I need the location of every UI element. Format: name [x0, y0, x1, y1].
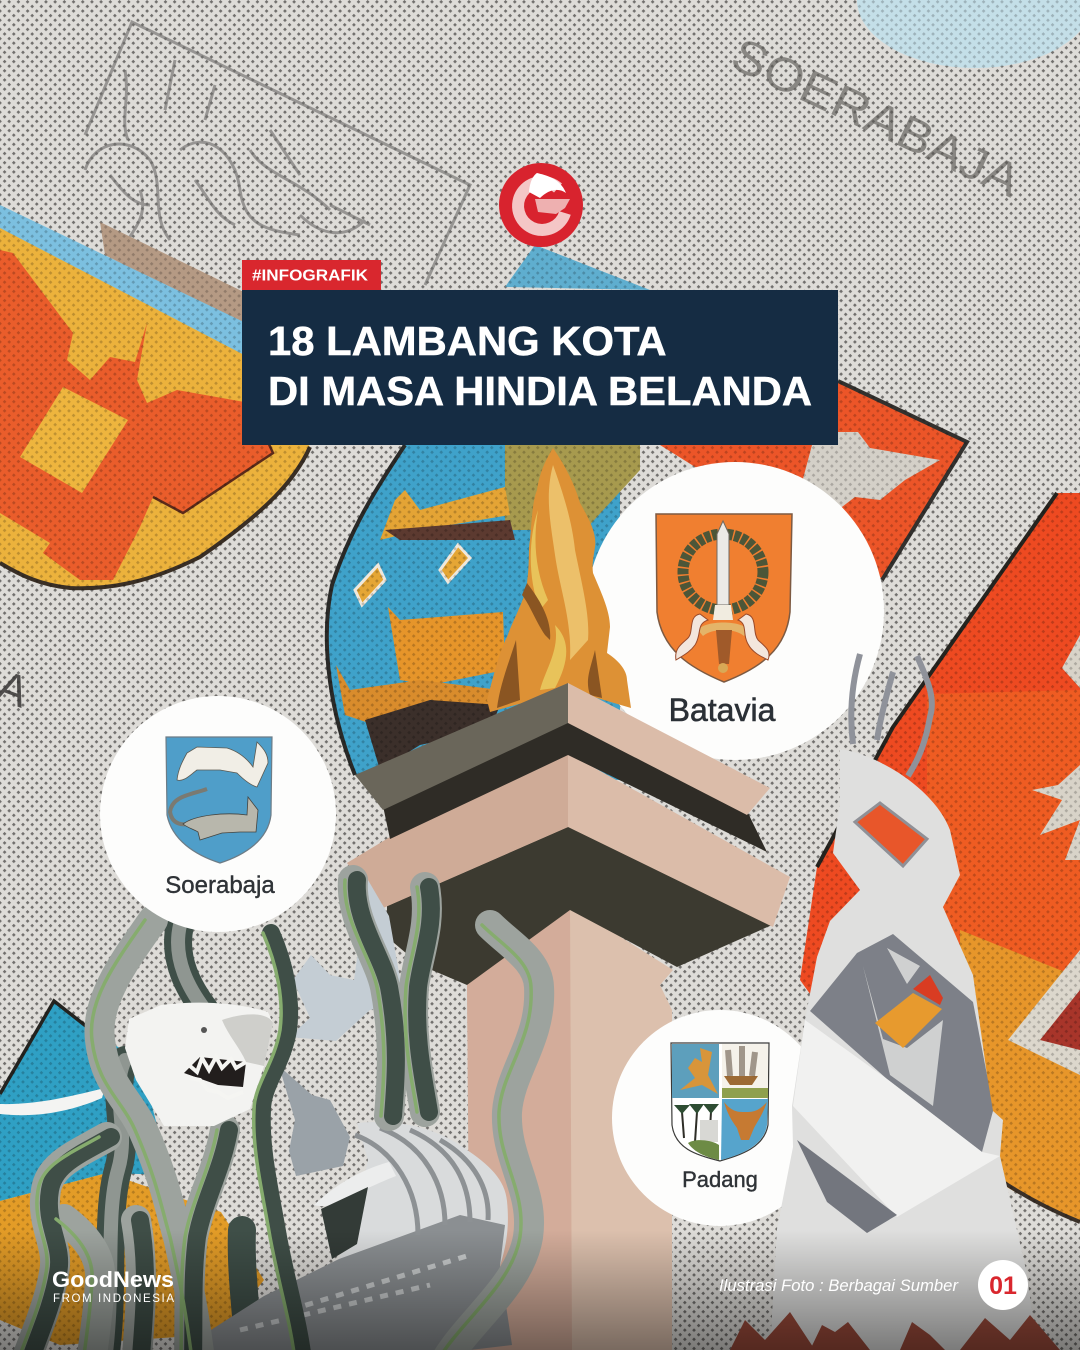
- lizard: [170, 789, 207, 824]
- back kelp: [105, 925, 248, 1350]
- flames at bottom right: [730, 1312, 1060, 1350]
- left fin: [0, 1088, 105, 1115]
- illustration: shark, crocodile and kelp: [0, 880, 539, 1350]
- panel: Soerabaja circle: [100, 696, 336, 932]
- icon: Batavia coat of arms: [656, 514, 792, 682]
- crocodile head: [279, 1066, 350, 1176]
- red shield with bird, right of title: [660, 381, 967, 580]
- illustration: Tugu monument with flame: [347, 448, 790, 1350]
- brand: GoodNews from Indonesia: [52, 1267, 174, 1305]
- title block: [242, 290, 838, 445]
- label: Padang: Padang: [682, 1167, 758, 1192]
- panel: Padang circle: [612, 1010, 828, 1226]
- icon: Padang coat of arms: [671, 1043, 769, 1161]
- shield with red fortress, top left: [0, 205, 310, 588]
- grey interior of the spiral: [810, 934, 993, 1152]
- blue and orange shield, bottom left: [0, 1001, 264, 1345]
- illustration: twisted white spiral monument: [770, 654, 1037, 1350]
- flame: [487, 448, 631, 712]
- panel: Batavia circle: [586, 462, 884, 760]
- page number badge: 01: [989, 1272, 1017, 1300]
- icon: Soerabaja coat of arms: [166, 737, 272, 863]
- crocodile front leg: [314, 1162, 396, 1206]
- crocodile: [189, 1066, 512, 1350]
- title: DI MASA HINDIA BELANDA: [268, 368, 812, 414]
- sketched emblem top left: [85, 22, 470, 285]
- bottom fade: [0, 1230, 1080, 1350]
- prongs: [851, 654, 932, 776]
- dark kelp over shark: [22, 880, 431, 1350]
- dark gap under leg: [321, 1187, 368, 1259]
- rear shark: [289, 880, 404, 1041]
- page number badge: [978, 1260, 1028, 1310]
- pillar: [467, 905, 673, 1350]
- brand: GoodNews from Indonesia: GoodNews: [52, 1267, 174, 1292]
- map label Soerabaja: SOERABAJA: [724, 27, 1030, 207]
- front kelp grey edges: [18, 880, 539, 1350]
- shark: [125, 1003, 273, 1126]
- crocodile back ridges: [355, 1128, 488, 1235]
- crocodile body: [339, 1122, 508, 1280]
- label: Soerabaja: Soerabaja: [165, 872, 275, 899]
- inner light facets: [863, 948, 943, 1106]
- lower capital: [347, 719, 790, 985]
- upper capital: [355, 683, 770, 815]
- kelp green ribs: [10, 880, 531, 1350]
- brand: GoodNews from Indonesia: FROM INDONESIA: [53, 1293, 174, 1305]
- shield with blue band behind title: [505, 245, 650, 290]
- fish: [177, 742, 268, 787]
- monument body: [770, 749, 1037, 1350]
- hashtag label: #INFOGRAFIK: [252, 268, 369, 284]
- hashtag label: [242, 260, 381, 290]
- label: Batavia: Batavia: [669, 692, 776, 728]
- blue shield with golden animals, centre: [327, 445, 640, 780]
- logo badge: [499, 163, 583, 247]
- white ribbon: [793, 1020, 1000, 1217]
- lower grey fold: [797, 1140, 897, 1233]
- title: 18 LAMBANG KOTA: [268, 318, 666, 364]
- orange and red window: [875, 975, 943, 1048]
- pale blue shield corner, top right: [857, 0, 1080, 68]
- photo credit: Ilustrasi Foto : Berbagai Sumber: [719, 1277, 960, 1295]
- red hole through the spiral: [855, 803, 927, 866]
- red shield, right: [800, 493, 1080, 1222]
- crocodile tail: [189, 1215, 512, 1350]
